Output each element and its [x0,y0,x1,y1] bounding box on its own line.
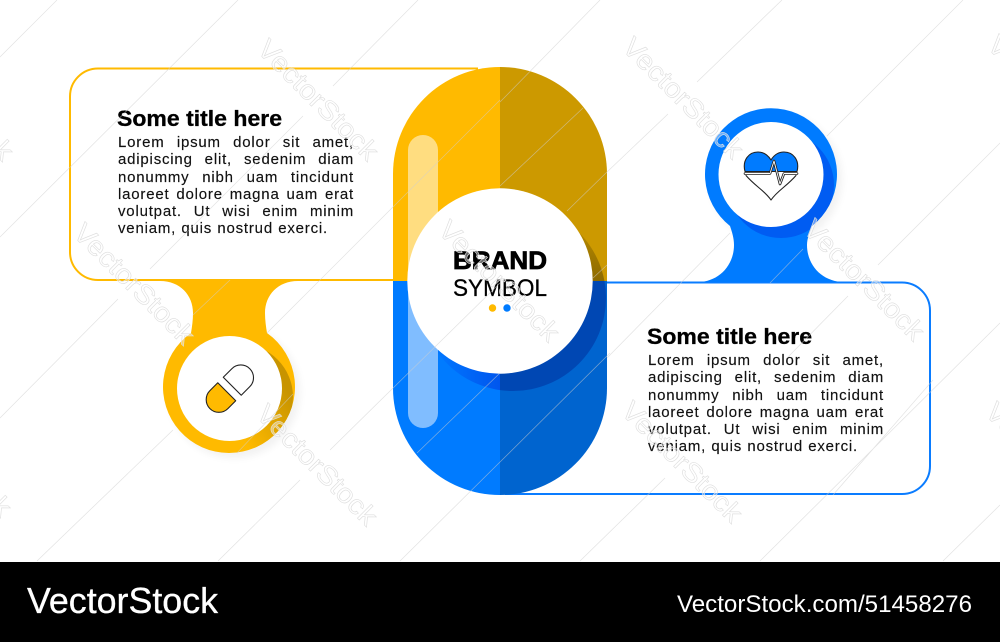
footer bar: VectorStock.com/51458276 [677,591,972,618]
text block: right box body: laoreet dolore magna uam erat [648,404,884,421]
icon: pill [201,360,259,418]
central capsule [393,67,607,495]
text block: left box body: veniam, quis nostrud exerci. [118,220,328,237]
capsule quadrants [393,67,607,495]
watermarks: VectorStock [617,32,750,165]
watermarks: VectorStock [68,218,201,351]
watermarks: VectorStock [251,399,384,532]
watermarks: VectorStock [433,215,566,348]
title: left box: Some title here [117,106,282,131]
brand symbol logo: SYMBOL [453,275,547,302]
watermarks: VectorStock [616,396,749,529]
centre circle [407,188,593,374]
text block: left box body: Lorem ipsum dolor sit amet, [118,134,354,151]
text block: left box body: nonummy nibh uam tincidunt [118,169,354,186]
shadow of centre circle [444,232,606,391]
capsule highlight [408,135,438,428]
text block: left box body [118,134,354,237]
text block: left box body: laoreet dolore magna uam erat [118,186,354,203]
watermarks: VectorStock [252,34,385,167]
watermarks [0,30,1000,532]
yellow pin with pill icon [160,281,300,458]
text block: right box body [648,352,884,455]
text block: right box body: veniam, quis nostrud exerci. [648,438,858,455]
icon: heart with pulse [744,152,798,200]
blue pin with heart icon [698,108,844,282]
footer bar [0,562,1000,642]
brand symbol logo: BRAND [453,247,547,275]
footer bar: VectorStock [27,580,219,621]
brand symbol logo [453,247,547,312]
title: right box: Some title here [647,324,812,349]
panel outline: right text box [505,282,930,494]
watermarks: VectorStock [798,214,931,347]
text block: left box body: volutpat. Ut wisi enim minim [118,203,354,220]
text block: right box body: Lorem ipsum dolor sit amet, [648,352,884,369]
panel outline: left text box [70,68,478,280]
text block: right box body: volutpat. Ut wisi enim minim [648,421,884,438]
text block: right box body: nonummy nibh uam tincidunt [648,387,884,404]
text block: right box body: adipiscing elit, sedenim diam [648,369,884,386]
text block: left box body: adipiscing elit, sedenim diam [118,151,354,168]
